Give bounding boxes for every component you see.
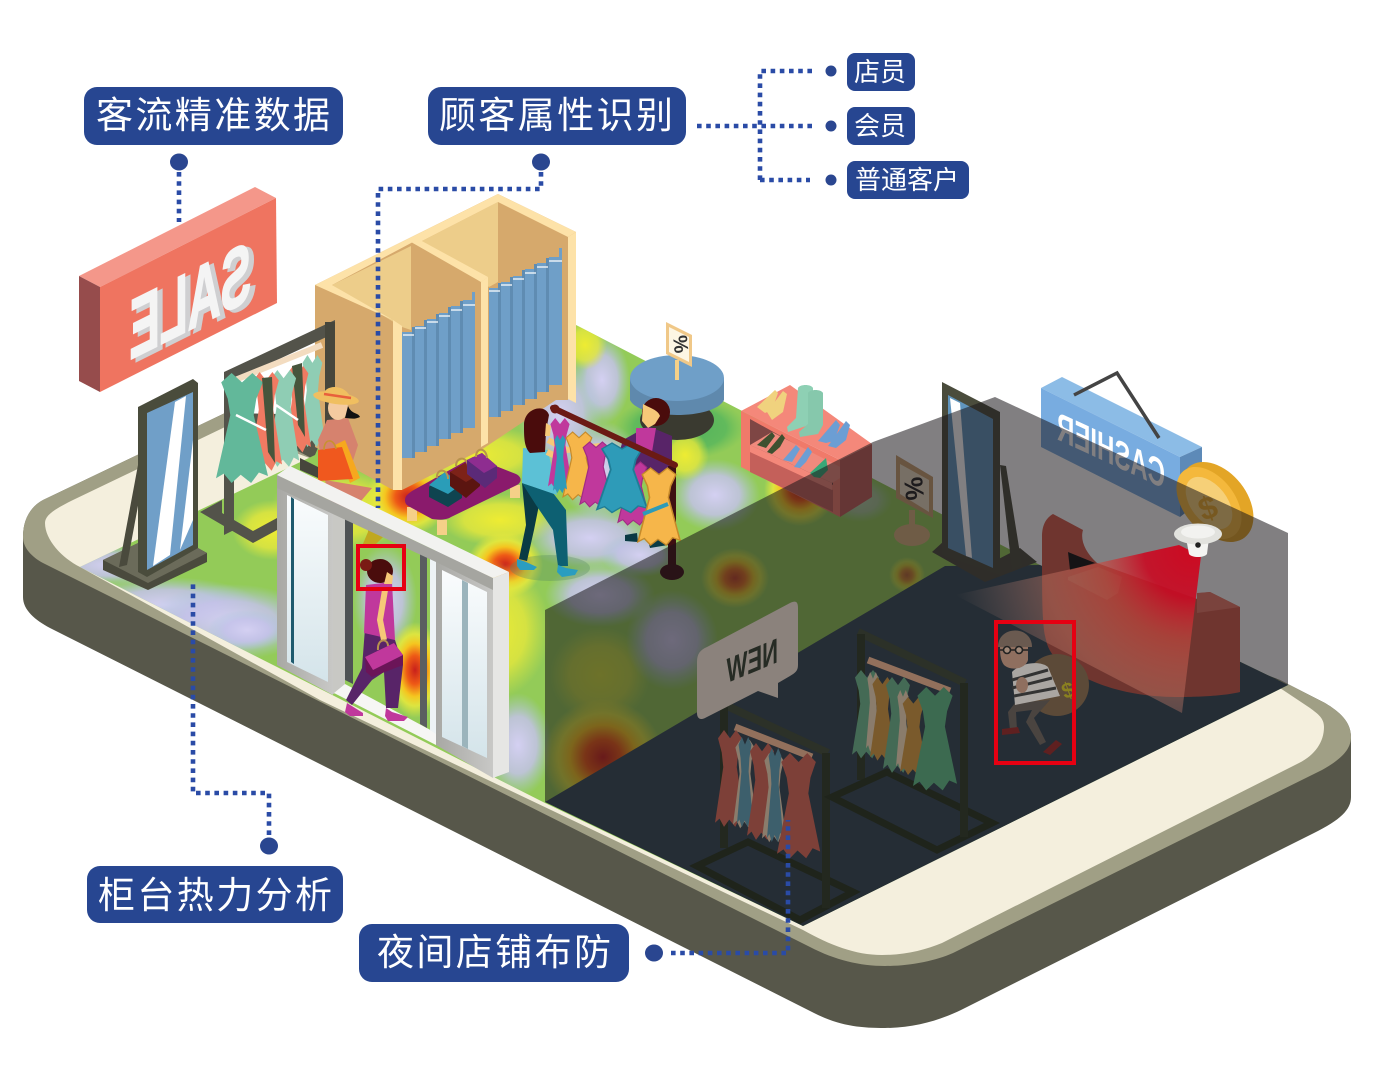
NEW speech sign: NEW <box>726 632 778 692</box>
translucent night overlay <box>545 397 1288 926</box>
label: 会员 <box>847 107 915 145</box>
label: 夜间店铺布防 <box>359 924 629 982</box>
label: 柜台热力分析: 柜台热力分析 <box>98 875 334 916</box>
gold coin <box>1163 448 1268 556</box>
door end post <box>493 572 509 778</box>
connector: branch list <box>697 66 836 186</box>
SALE hanging sign: SALE <box>129 223 251 378</box>
solid night floor <box>545 565 1288 926</box>
phone bezel ring <box>23 413 1351 966</box>
connector: customer attributes <box>378 154 550 508</box>
clerk behind rack <box>620 398 672 548</box>
label: 夜间店铺布防: 夜间店铺布防 <box>377 932 613 973</box>
sign hanger <box>1074 373 1159 438</box>
label: 顾客属性识别 <box>428 87 686 145</box>
CASHIER sign <box>1041 377 1202 517</box>
shop door left panel <box>277 475 333 695</box>
phone screen cream <box>45 427 1324 955</box>
label: 会员: 会员 <box>854 111 906 141</box>
curtain right <box>489 248 562 417</box>
door detection box <box>358 546 404 589</box>
woman entering door <box>345 559 408 721</box>
fitting rooms <box>315 194 576 490</box>
label: 店员: 店员 <box>854 57 906 87</box>
connector: night guard <box>645 820 788 962</box>
thief with sack <box>998 630 1089 755</box>
connector: heat analysis <box>193 580 278 854</box>
connector: passenger flow <box>170 154 188 222</box>
clothes rack back left <box>200 320 335 543</box>
label: 顾客属性识别: 顾客属性识别 <box>439 95 675 136</box>
NEW speech sign <box>697 602 798 719</box>
hat woman leg behind door <box>362 518 384 548</box>
door top <box>277 466 509 578</box>
boots <box>787 385 823 437</box>
SALE hanging sign: SALE <box>134 225 256 380</box>
phone body base <box>23 413 1351 1028</box>
SALE hanging sign <box>79 187 277 392</box>
CASHIER sign: CASHIER <box>1057 404 1165 498</box>
camera light cone <box>955 545 1201 713</box>
door frame <box>277 466 509 778</box>
woman with hat and shopping bags <box>312 387 372 520</box>
door centre jamb <box>333 505 436 745</box>
thief with sack: $ <box>1058 676 1078 704</box>
label: 店员 <box>847 53 915 91</box>
round pedestal with price sign: % <box>668 334 692 354</box>
clothes rack front centre <box>697 705 853 920</box>
door right mid strip <box>420 552 436 734</box>
label: 柜台热力分析 <box>87 866 343 923</box>
mirror left <box>103 379 207 590</box>
round pedestal with price sign <box>630 322 724 440</box>
purple table with handbags <box>405 450 521 535</box>
gold coin: $ <box>1193 488 1223 528</box>
shoe shelf <box>741 385 872 517</box>
dome camera <box>1174 524 1222 557</box>
label: 客流精准数据: 客流精准数据 <box>96 95 332 136</box>
mirror right <box>932 382 1037 582</box>
label: 客流精准数据 <box>84 87 343 145</box>
door lintel <box>277 475 493 590</box>
cashier counter <box>1042 514 1240 697</box>
thief detection box <box>996 622 1074 763</box>
shopper with teal top <box>510 408 600 581</box>
label: 普通客户: 普通客户 <box>855 165 959 195</box>
label: 普通客户 <box>847 161 969 199</box>
door right panel <box>436 550 493 778</box>
heat map floor <box>80 325 1281 926</box>
clothes rail with garments <box>548 404 684 580</box>
curtain left <box>402 292 475 458</box>
dark price sign: % <box>898 476 930 502</box>
dark price sign <box>894 455 933 546</box>
shoes <box>757 390 850 478</box>
clothes rack back centre <box>832 632 992 850</box>
